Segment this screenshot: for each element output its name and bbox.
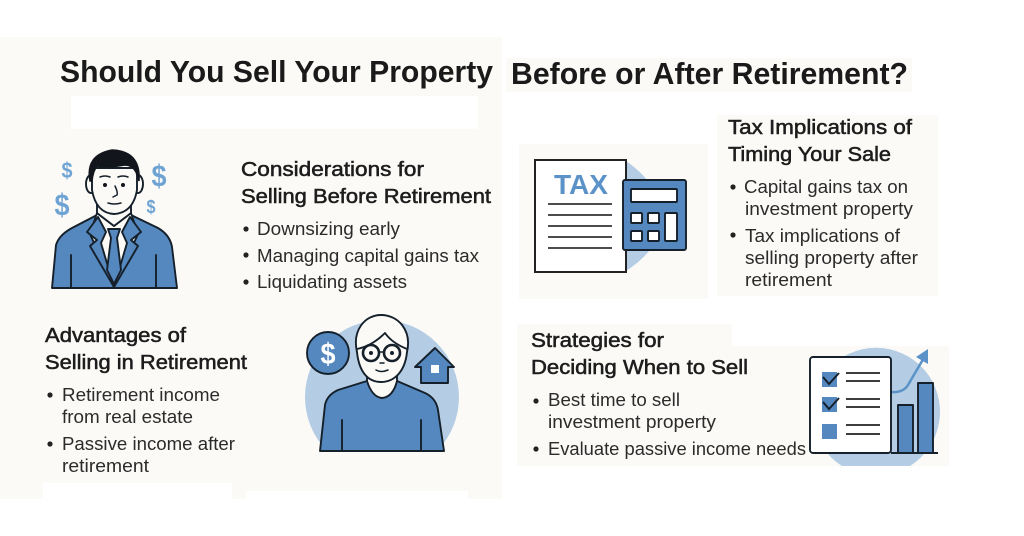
heading: Selling in Retirement [45, 351, 247, 374]
icon: house [415, 348, 454, 383]
title [60, 54, 908, 91]
heading: Strategies for [531, 329, 664, 352]
heading [241, 158, 491, 208]
bullet list: retirement [745, 269, 832, 290]
heading [45, 324, 247, 374]
bullet list: Liquidating assets [257, 271, 407, 292]
bullet list [47, 384, 235, 476]
icon: bar chart [891, 383, 938, 453]
heading: Deciding When to Sell [531, 356, 748, 379]
icon: backdrop circle [812, 348, 940, 466]
bullet list: Passive income after [62, 433, 235, 454]
bullet list: investment property [548, 411, 717, 432]
bullet list [533, 389, 806, 459]
panel: strategies background [517, 324, 949, 466]
icon: floating dollar signs [54, 158, 166, 222]
bullet list: Managing capital gains tax [257, 245, 480, 266]
icon: businessman with dollar signs [52, 150, 177, 288]
icon: head [97, 196, 131, 226]
heading [531, 329, 748, 379]
icon: floating dollar signs: $ [54, 187, 70, 222]
bullet list: investment property [745, 198, 914, 219]
icon: tax document and calculator [535, 160, 686, 272]
icon: floating dollar signs: $ [146, 197, 156, 217]
panel: tax illustration background [519, 144, 708, 299]
panel: right title background [506, 58, 912, 92]
icon: backdrop circle [305, 320, 459, 451]
bullet list: retirement [62, 455, 149, 476]
bullet list: Best time to sell [548, 389, 680, 410]
bullet list: Capital gains tax on [744, 176, 908, 197]
icon: dollar coin [307, 332, 349, 374]
icon: suit [52, 215, 177, 288]
heading: Considerations for [241, 158, 424, 181]
bullet list: Retirement income [62, 384, 220, 405]
bullet list [243, 218, 480, 292]
text block: advantages of selling in retirement [45, 324, 247, 476]
icon: floating dollar signs: $ [62, 158, 72, 183]
heading: Advantages of [45, 324, 186, 347]
icon: tax document [535, 160, 626, 272]
bullet list: Evaluate passive income needs [548, 438, 806, 459]
icon: calculator [623, 180, 686, 250]
title: Before or After Retirement? [511, 56, 908, 91]
text block: considerations for selling before retirement [241, 158, 491, 292]
icon: senior head [367, 368, 397, 398]
heading [728, 116, 912, 166]
icon: checklist and growth chart [810, 348, 940, 466]
text block: strategies for deciding when to sell [531, 329, 806, 459]
bullet list: selling property after [745, 247, 918, 268]
icon: backdrop circle [626, 161, 650, 271]
bullet list [730, 176, 918, 290]
heading: Selling Before Retirement [241, 185, 491, 208]
icon: torso [320, 381, 444, 451]
icon: tax document and calculator: TAX [554, 169, 609, 200]
icon: growth arrow [891, 349, 928, 392]
icon: floating dollar signs: $ [152, 158, 166, 193]
bullet list: Tax implications of [745, 225, 901, 246]
icon: senior with dollar coin and house [305, 315, 459, 451]
panel: tax text background [717, 115, 938, 296]
panel: left background [0, 37, 502, 499]
heading: Timing Your Sale [728, 143, 891, 166]
bullet list: Downsizing early [257, 218, 401, 239]
icon: senior with dollar coin and house: $ [320, 338, 336, 371]
bullet list: from real estate [62, 406, 193, 427]
icon: checklist [810, 357, 891, 453]
heading: Tax Implications of [728, 116, 912, 139]
text block: tax implications of timing your sale [728, 116, 918, 290]
title: Should You Sell Your Property [60, 54, 494, 89]
